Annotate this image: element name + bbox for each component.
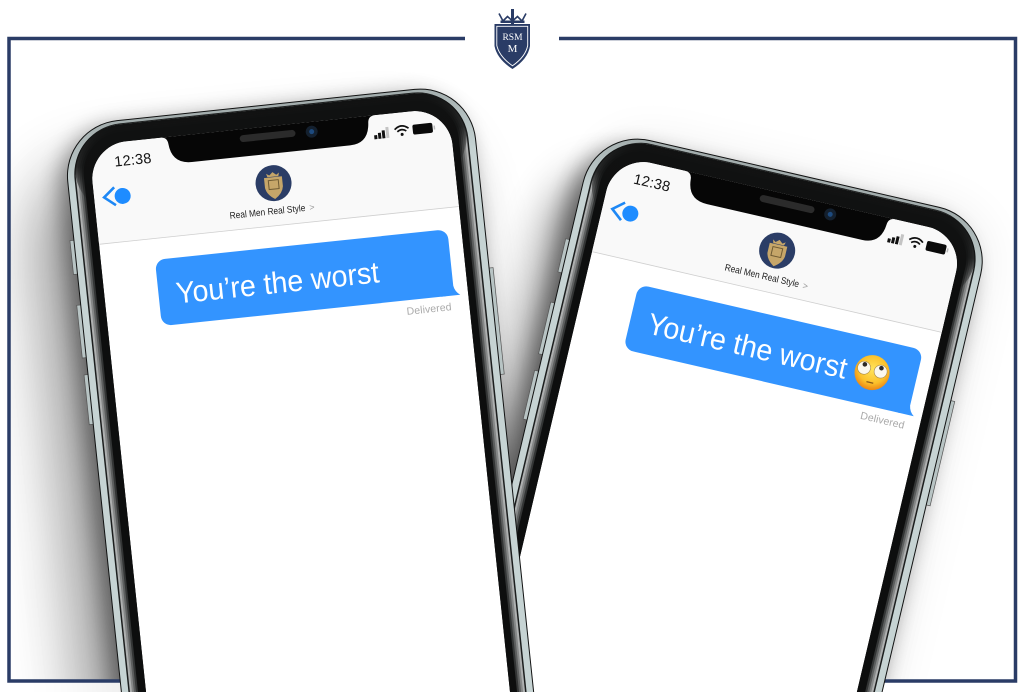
contact avatar bbox=[755, 229, 799, 272]
delivered label: Delivered bbox=[859, 410, 906, 432]
side buttons bbox=[523, 239, 971, 513]
phone: right, tilted clockwise bbox=[512, 138, 983, 692]
metal body and bezel bbox=[409, 127, 994, 692]
emoji: face with rolling eyes bbox=[851, 352, 893, 394]
contact name: Real Men Real Style bbox=[724, 262, 800, 290]
screen bbox=[520, 162, 957, 692]
notch with speaker and camera bbox=[160, 115, 378, 165]
status icons bbox=[887, 231, 950, 256]
screen bbox=[89, 107, 532, 692]
side buttons bbox=[70, 197, 505, 425]
logo: crest: M bbox=[508, 43, 518, 55]
delivered label: Delivered bbox=[406, 302, 452, 318]
notch with speaker and camera bbox=[679, 171, 896, 246]
message bubble bbox=[623, 284, 929, 416]
metal body and bezel bbox=[61, 83, 555, 692]
logo: crest: RSM bbox=[502, 33, 523, 43]
soft outer shadows bbox=[36, 137, 528, 692]
time: 12:38 bbox=[114, 151, 152, 171]
status icons bbox=[373, 122, 436, 139]
back chevron and unread dot bbox=[610, 200, 640, 224]
contact chevron: > bbox=[309, 202, 315, 212]
phone: left, tilted counter-clockwise bbox=[58, 83, 560, 692]
time: 12:38 bbox=[632, 172, 672, 196]
contact chevron: > bbox=[802, 280, 809, 291]
back chevron and unread dot bbox=[103, 186, 132, 206]
logo: crest bbox=[494, 9, 530, 69]
contact name: Real Men Real Style bbox=[229, 203, 306, 222]
message text: You’re the worst bbox=[174, 256, 381, 311]
contact avatar bbox=[254, 163, 293, 203]
message text: You’re the worst bbox=[644, 308, 851, 386]
message bubble bbox=[155, 229, 460, 326]
